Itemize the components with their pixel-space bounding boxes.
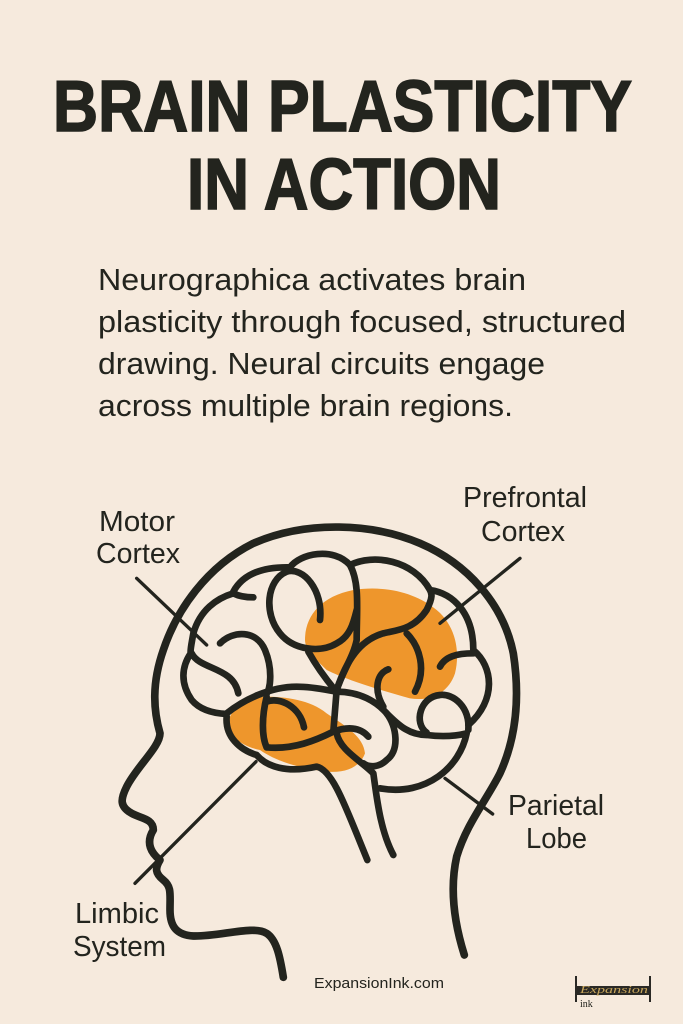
label: limbic system: Limbic: [75, 898, 159, 930]
logo: ink: [580, 999, 593, 1010]
label: prefrontal cortex: Cortex: [481, 516, 565, 548]
highlight: upper orange region: [305, 589, 457, 699]
intro text block: [98, 262, 626, 423]
label: parietal lobe: Parietal: [508, 790, 604, 822]
pointer lines: [135, 558, 520, 883]
title: IN ACTION: [187, 145, 501, 225]
label: motor cortex: [96, 506, 180, 570]
label: motor cortex: Cortex: [96, 538, 180, 570]
label: motor cortex: Motor: [99, 506, 175, 538]
label: parietal lobe: [508, 790, 604, 855]
intro text block: drawing. Neural circuits engage: [98, 346, 545, 381]
label: prefrontal cortex: [463, 482, 587, 548]
brain diagram: [122, 527, 520, 977]
label: limbic system: [73, 898, 166, 963]
label: prefrontal cortex: Prefrontal: [463, 482, 587, 514]
logo: [576, 976, 650, 1010]
brain outline and folds: [183, 554, 489, 860]
intro text block: Neurographica activates brain: [98, 262, 526, 297]
website url: ExpansionInk.com: [314, 975, 444, 992]
intro text block: across multiple brain regions.: [98, 388, 513, 423]
head outline: [122, 527, 517, 977]
highlight: lower orange region: [228, 697, 365, 772]
title: [53, 67, 632, 225]
intro text block: plasticity through focused, structured: [98, 304, 626, 339]
label: limbic system: System: [73, 931, 166, 963]
label: parietal lobe: Lobe: [526, 823, 587, 855]
logo: Expansion: [579, 984, 649, 996]
